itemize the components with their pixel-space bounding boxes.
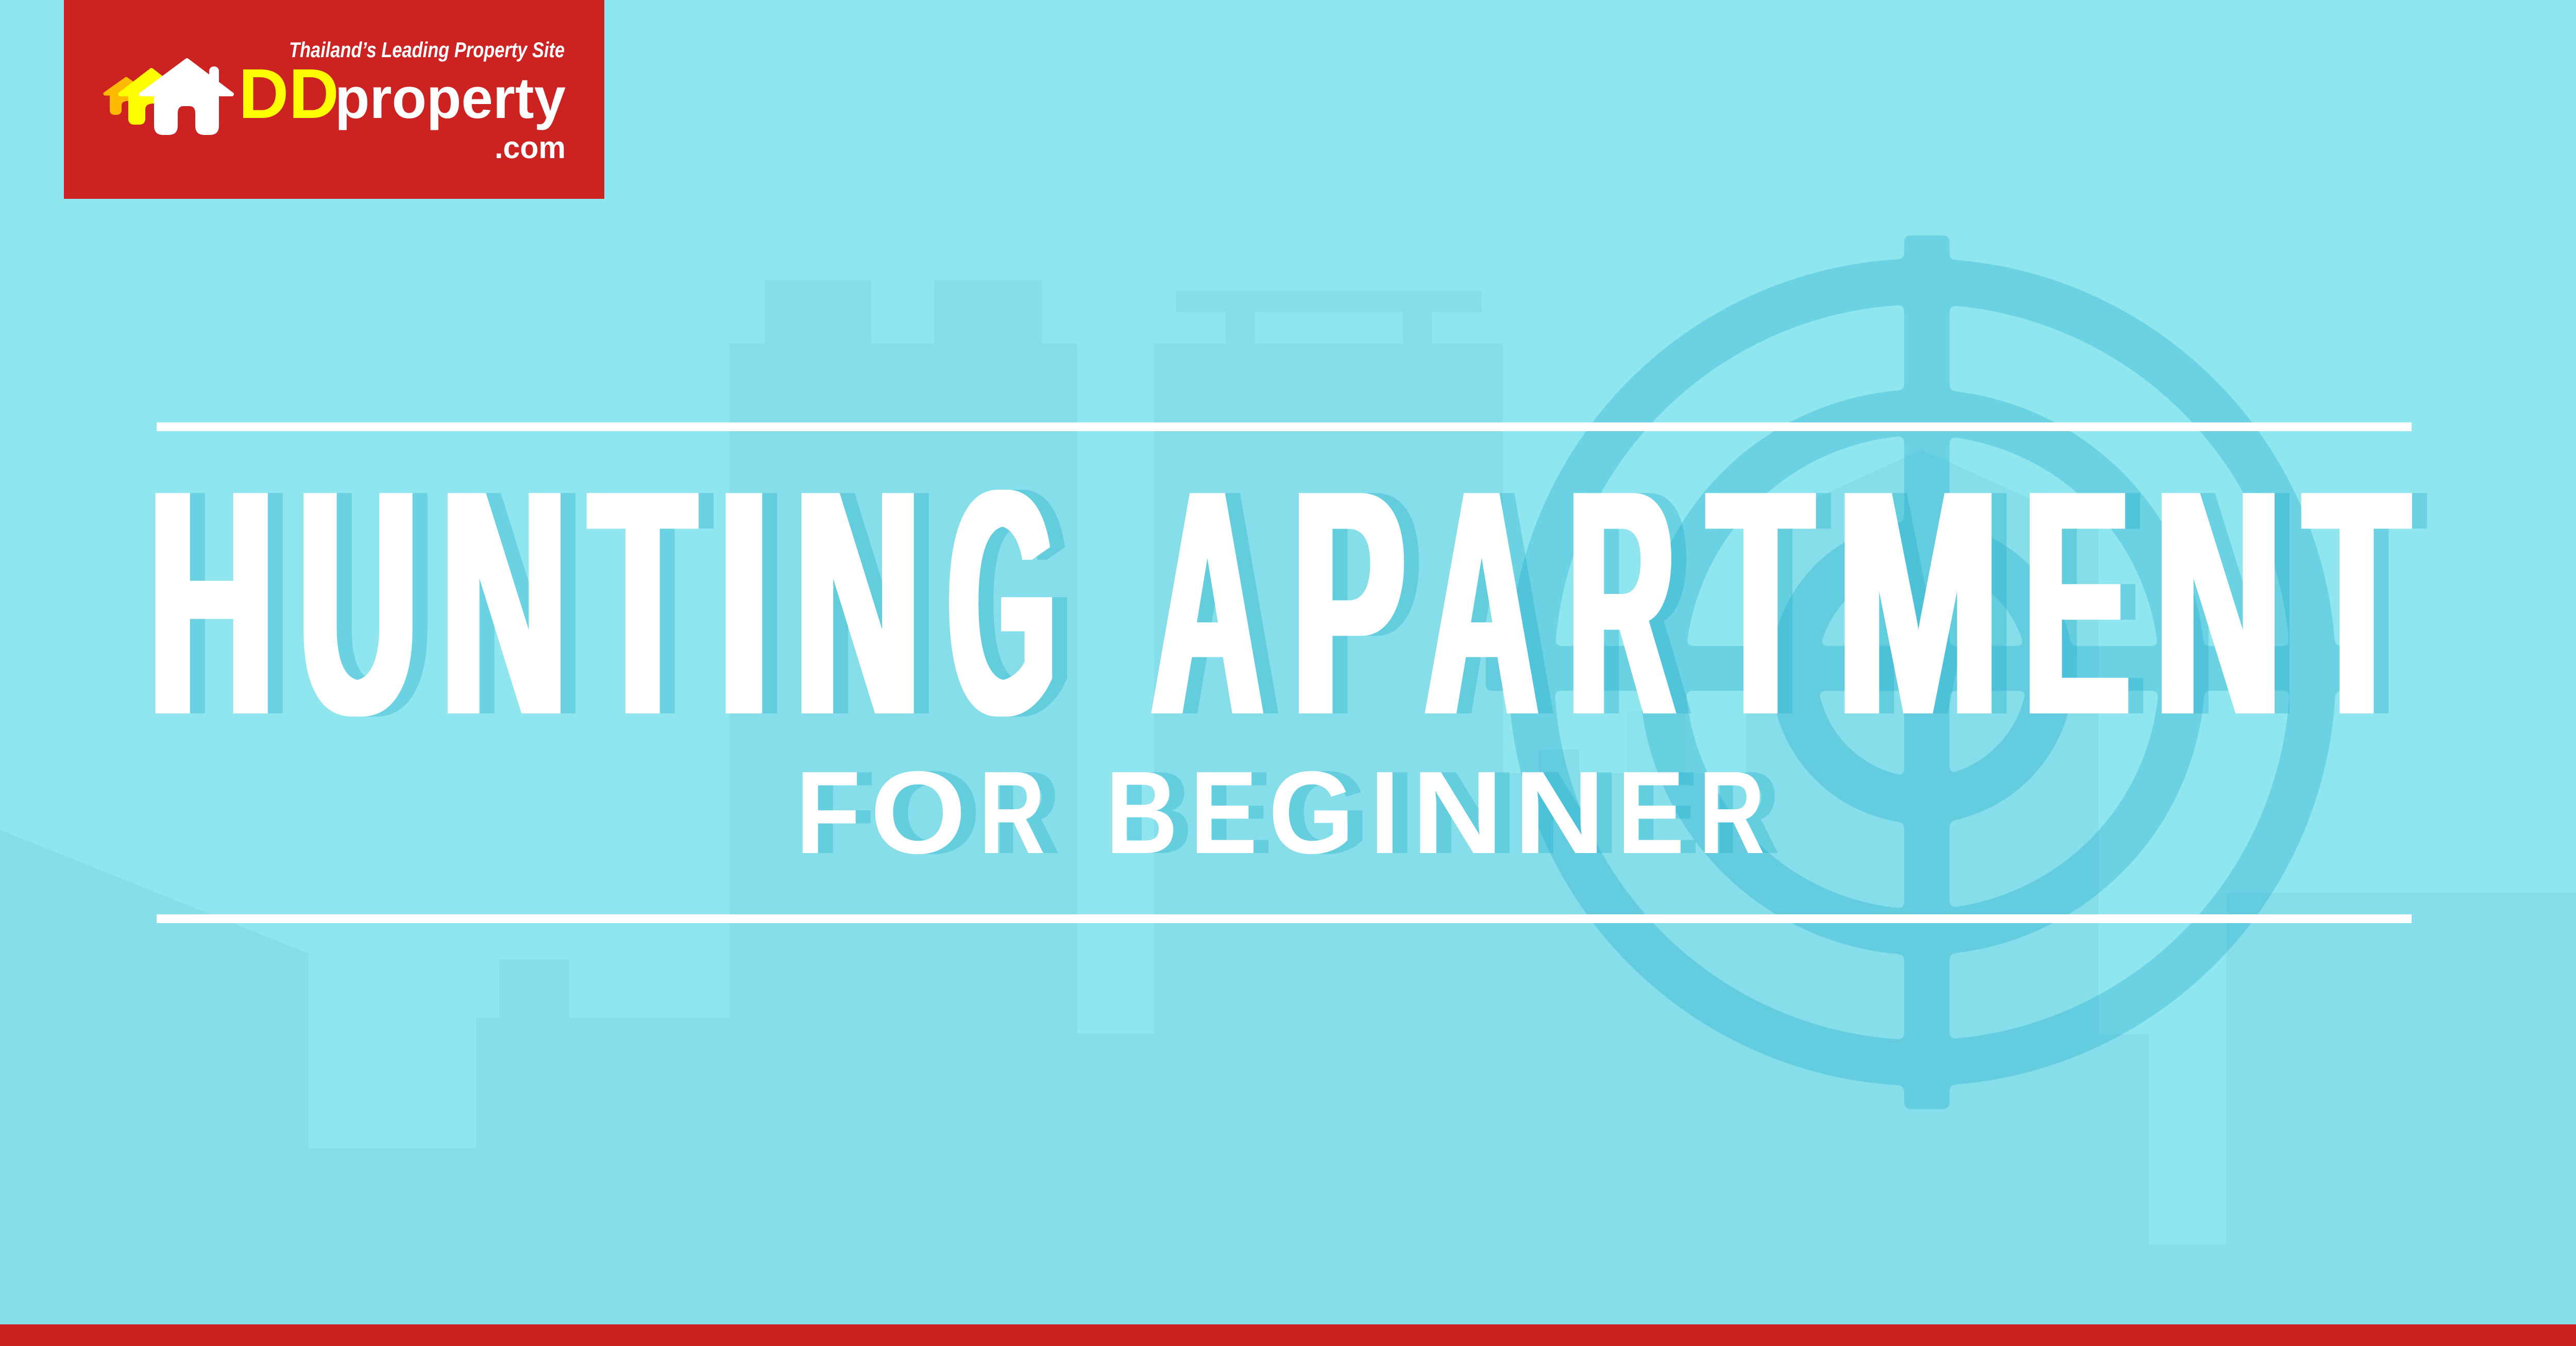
logo wordmark property: property <box>335 66 566 130</box>
logo wordmark .com: .com <box>495 130 566 165</box>
subtitle: FOR BEGINNER: F <box>795 747 861 878</box>
title: HUNTING APARTMENT: P <box>1292 423 1405 781</box>
top rule <box>157 422 2412 431</box>
subtitle: FOR BEGINNER: G <box>1268 747 1354 878</box>
footer bar <box>0 1324 2576 1346</box>
logo: DDproperty.com red panel <box>64 0 604 199</box>
subtitle: FOR BEGINNER: R <box>979 747 1045 878</box>
title: HUNTING APARTMENT: R <box>1568 423 1675 781</box>
bottom rule <box>157 914 2412 923</box>
subtitle: FOR BEGINNER: I <box>1370 747 1400 878</box>
title: HUNTING APARTMENT: H <box>148 423 275 781</box>
subtitle: FOR BEGINNER: O <box>870 747 966 878</box>
logo wordmark DD: DD <box>239 55 339 133</box>
title: HUNTING APARTMENT: T <box>2304 423 2409 781</box>
subtitle: FOR BEGINNER: N <box>1412 747 1503 878</box>
title: HUNTING APARTMENT: A <box>1152 423 1263 781</box>
background: city skyline silhouette <box>0 280 2576 1346</box>
title: HUNTING APARTMENT: G <box>948 423 1056 781</box>
subtitle: FOR BEGINNER: R <box>1699 747 1765 878</box>
subtitle: FOR BEGINNER <box>795 747 1778 878</box>
title: HUNTING APARTMENT: N <box>2155 423 2282 781</box>
title: HUNTING APARTMENT: N <box>794 423 921 781</box>
title: HUNTING APARTMENT <box>148 423 2427 781</box>
title: HUNTING APARTMENT: N <box>440 423 568 781</box>
title: HUNTING APARTMENT: M <box>1836 423 2000 781</box>
title: HUNTING APARTMENT: T <box>589 423 696 781</box>
icon: crosshair target reticle <box>1486 235 2365 1109</box>
title: HUNTING APARTMENT: E <box>2024 423 2130 781</box>
subtitle: FOR BEGINNER: E <box>1617 747 1685 878</box>
subtitle: FOR BEGINNER: E <box>1190 747 1258 878</box>
subtitle: FOR BEGINNER: N <box>1514 747 1605 878</box>
subtitle: FOR BEGINNER: B <box>1106 747 1178 878</box>
title: HUNTING APARTMENT: A <box>1426 423 1538 781</box>
logo tagline: Thailand’s Leading Property Site <box>289 38 565 62</box>
icon: orange house <box>105 79 147 115</box>
title: HUNTING APARTMENT: T <box>1708 423 1813 781</box>
title: HUNTING APARTMENT: I <box>718 423 770 781</box>
title: HUNTING APARTMENT: U <box>298 423 418 781</box>
icon: white house <box>141 60 232 135</box>
icon: yellow house <box>120 70 183 125</box>
